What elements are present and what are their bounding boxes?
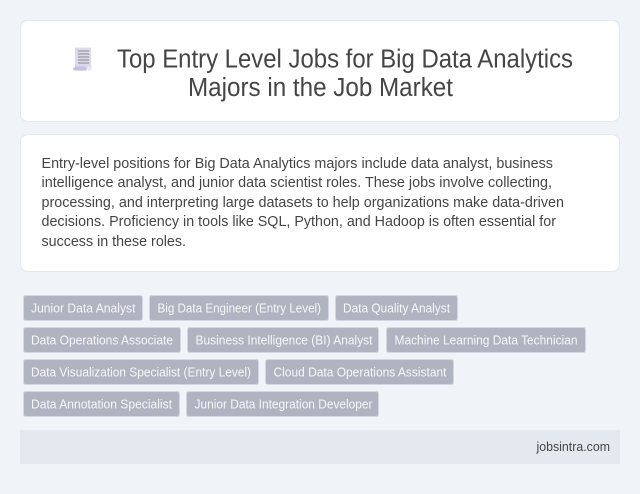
tag bbox=[24, 296, 142, 320]
tag bbox=[336, 296, 458, 320]
description text bbox=[42, 155, 564, 250]
tag: Junior Data Analyst bbox=[31, 302, 136, 316]
tag bbox=[266, 360, 454, 384]
footer bar bbox=[20, 430, 620, 464]
description text: processing, and interpreting large datasets to help organizations make data-driven bbox=[42, 194, 564, 211]
icon: document receipt bbox=[73, 48, 92, 70]
tag: Machine Learning Data Technician bbox=[394, 334, 578, 348]
tag: Business Intelligence (BI) Analyst bbox=[196, 334, 373, 348]
tag: Cloud Data Operations Assistant bbox=[274, 366, 447, 380]
title bbox=[117, 46, 573, 102]
tag bbox=[150, 296, 328, 320]
tag bbox=[24, 392, 180, 416]
tag: Data Quality Analyst bbox=[343, 302, 450, 316]
tag list bbox=[24, 296, 586, 416]
footer source: jobsintra.com bbox=[536, 440, 610, 454]
tag: Big Data Engineer (Entry Level) bbox=[158, 302, 321, 316]
tag bbox=[24, 328, 180, 352]
tag: Data Annotation Specialist bbox=[31, 398, 173, 412]
description text: success in these roles. bbox=[42, 233, 186, 250]
tag: Data Visualization Specialist (Entry Level) bbox=[31, 366, 251, 380]
tag bbox=[386, 328, 586, 352]
tag bbox=[24, 360, 258, 384]
title: Top Entry Level Jobs for Big Data Analytics bbox=[117, 46, 573, 74]
tag bbox=[188, 328, 378, 352]
description text: decisions. Proficiency in tools like SQL, Python, and Hadoop is often essential for bbox=[42, 213, 556, 230]
title: Majors in the Job Market bbox=[188, 74, 453, 102]
panel: description bbox=[20, 134, 620, 272]
tag: Data Operations Associate bbox=[31, 334, 173, 348]
panel: title card bbox=[20, 20, 620, 122]
description text: Entry-level positions for Big Data Analytics majors include data analyst, business bbox=[42, 155, 553, 172]
tag bbox=[186, 392, 378, 416]
tag: Junior Data Integration Developer bbox=[194, 398, 372, 412]
description text: intelligence analyst, and junior data scientist roles. These jobs involve collecting, bbox=[42, 174, 552, 191]
